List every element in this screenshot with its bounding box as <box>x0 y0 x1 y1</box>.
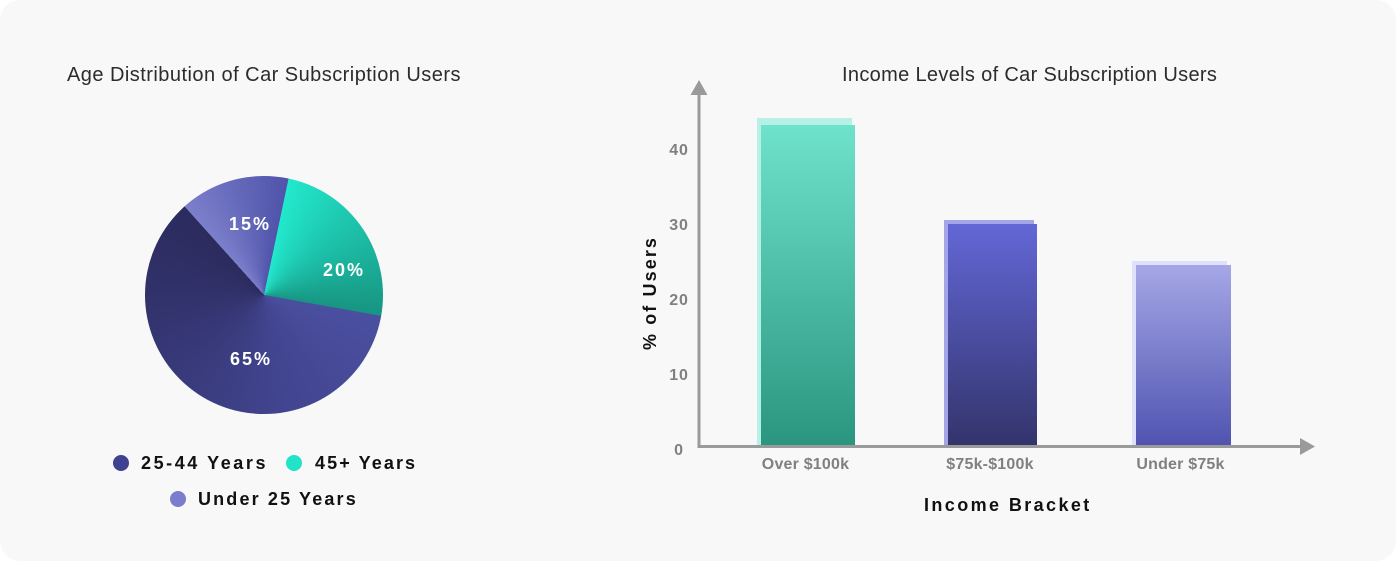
bar: $75k-$100k <box>944 220 1037 445</box>
axes and arrows <box>690 80 1315 455</box>
bar: Over $100k <box>757 118 855 445</box>
x label: $75k-$100k: $75k-$100k <box>946 456 1034 473</box>
label: 15%: 15% <box>229 214 271 234</box>
label: 20%: 20% <box>323 260 365 280</box>
y tick: 0: 0 <box>674 442 684 459</box>
heading: age distribution: Age Distribution of Car Subscription Users <box>67 64 461 86</box>
y tick: 40: 40 <box>669 142 689 159</box>
heading: income levels: Income Levels of Car Subscription Users <box>842 64 1217 86</box>
legend item: 25-44 Years: 25-44 Years <box>141 453 268 473</box>
legend item: Under 25 Years: Under 25 Years <box>198 489 358 509</box>
label: 65%: 65% <box>230 349 272 369</box>
legend item: 45+ Years: 45+ Years <box>315 453 417 473</box>
x label: Over $100k: Over $100k <box>762 456 849 473</box>
x label: Under $75k: Under $75k <box>1136 456 1225 473</box>
x axis title: Income Bracket <box>924 495 1092 515</box>
legend <box>113 453 417 509</box>
bar chart <box>640 80 1315 515</box>
y axis title: % of Users <box>640 236 660 350</box>
y tick: 10: 10 <box>669 367 689 384</box>
y tick: 20: 20 <box>669 292 689 309</box>
pie chart <box>145 176 383 414</box>
bar: Under $75k <box>1132 261 1231 445</box>
y tick: 30: 30 <box>669 217 689 234</box>
